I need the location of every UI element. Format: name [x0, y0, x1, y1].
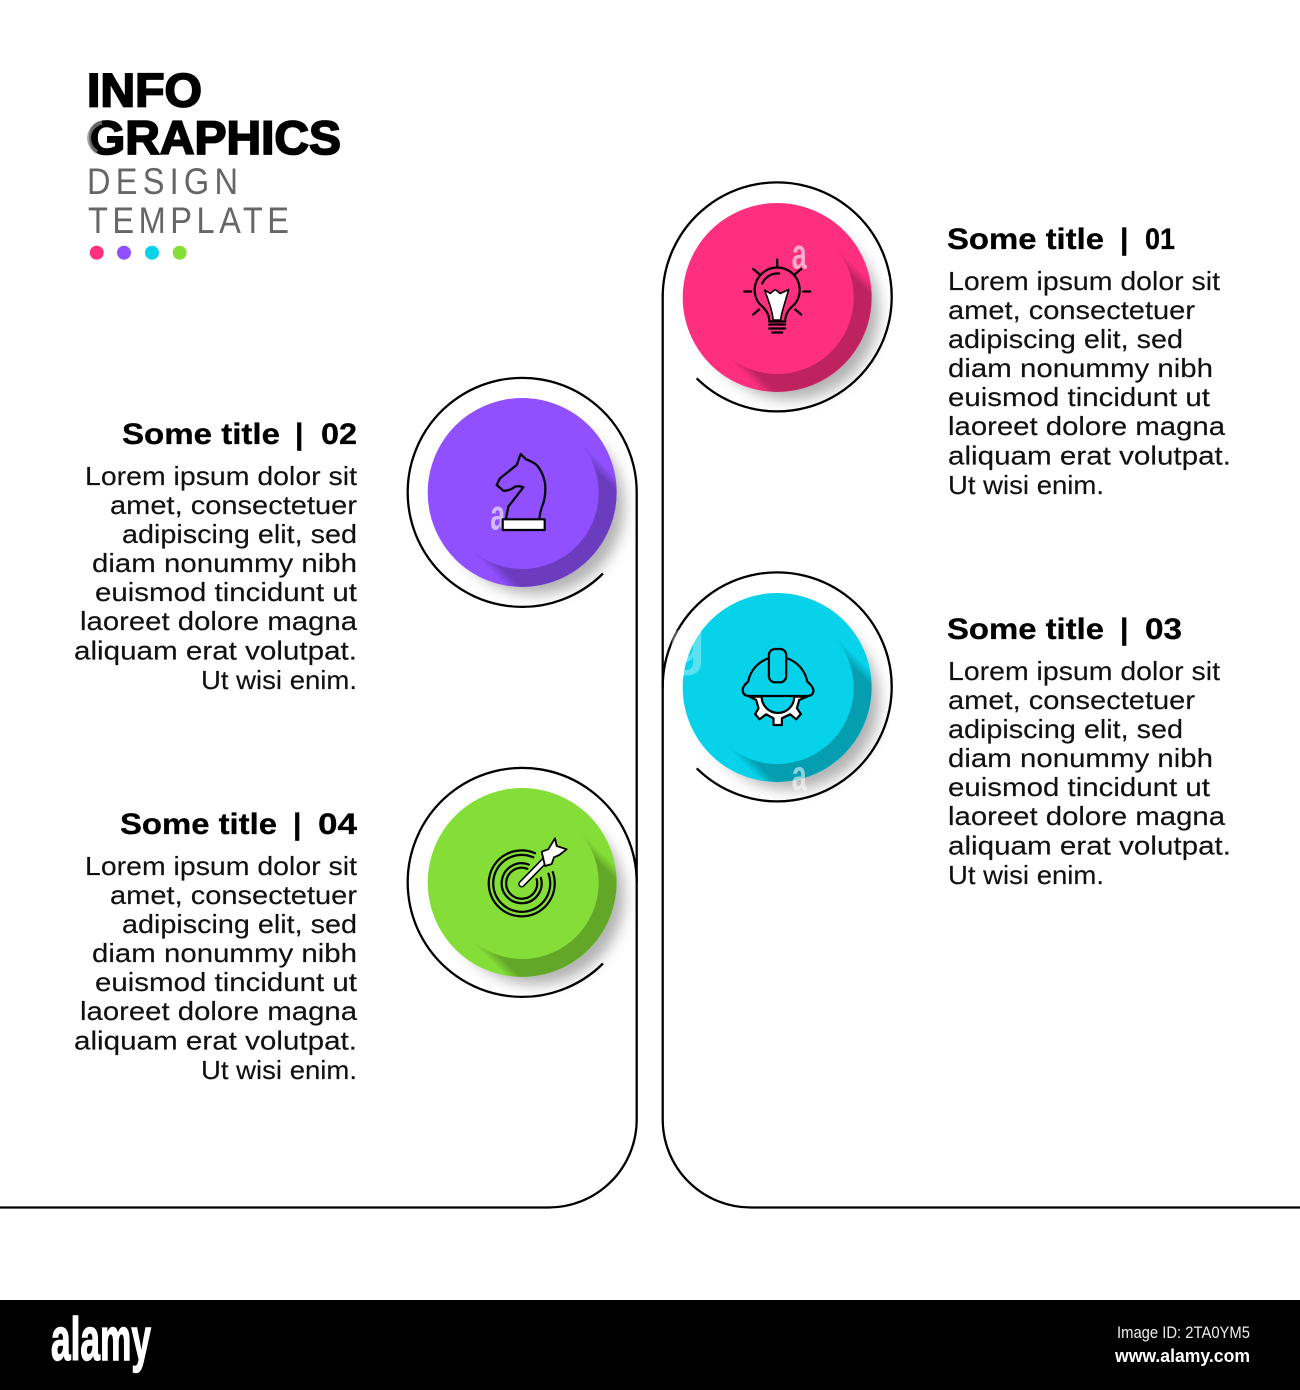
icon: chess knight	[497, 454, 545, 530]
left trunk line with spirals around steps 02 and 04	[0, 378, 637, 1208]
body text: step 03: Lorem ipsum dolor sit	[948, 656, 1221, 686]
body text: step 04: diam nonummy nibh	[92, 938, 357, 968]
right trunk line with spirals around steps 01 and 03	[663, 182, 1300, 1207]
icon: target with arrow	[489, 838, 567, 916]
step 03 circle: cyan with hard hat and gear icon: g	[669, 608, 705, 676]
step 03 circle: cyan with hard hat and gear icon	[669, 593, 872, 800]
title block	[87, 64, 341, 260]
body text: step 01: laoreet dolore magna	[948, 411, 1226, 441]
body text: step 02: laoreet dolore magna	[80, 606, 358, 636]
heading: Some title 01	[947, 223, 1175, 256]
heading: Some title 01: |	[1120, 223, 1128, 256]
title: INFO GRAPHICS: GRAPHICS	[88, 111, 341, 164]
subtitle: DESIGN TEMPLATE: DESIGN	[87, 161, 238, 202]
step 04 circle: green with target icon	[428, 788, 617, 977]
heading: Some title 04	[120, 808, 357, 841]
body text: step 01: diam nonummy nibh	[948, 353, 1213, 383]
watermark smudge over the G	[89, 122, 102, 152]
body text: step 03: Ut wisi enim.	[948, 860, 1104, 890]
heading: Some title 04: |	[293, 808, 301, 841]
heading: Some title 02: Some title	[122, 418, 280, 451]
body text: step 04: adipiscing elit, sed	[122, 909, 357, 939]
body text: step 03: adipiscing elit, sed	[948, 714, 1183, 744]
body text: step 03: aliquam erat volutpat.	[948, 830, 1231, 860]
body text: step 01: euismod tincidunt ut	[948, 382, 1211, 412]
body text: step 04: Lorem ipsum dolor sit	[85, 851, 358, 881]
body text: step 03: diam nonummy nibh	[948, 743, 1213, 773]
body text: step 03: laoreet dolore magna	[948, 801, 1226, 831]
text block: step 02	[74, 418, 358, 695]
body text: step 01: amet, consectetuer	[948, 295, 1195, 325]
body text: step 01	[948, 266, 1231, 500]
heading: Some title 02	[122, 418, 357, 451]
icon: hard hat with gear	[743, 649, 814, 725]
body text: step 02: Lorem ipsum dolor sit	[85, 461, 358, 491]
footer image id: Image ID: 2TA0YM5	[1117, 1323, 1250, 1342]
icon: light bulb	[744, 260, 810, 332]
body text: step 01: Lorem ipsum dolor sit	[948, 266, 1221, 296]
title: INFO GRAPHICS	[87, 64, 341, 164]
heading: Some title 04: 04	[318, 808, 357, 841]
soft shadows of the circles	[448, 224, 879, 984]
heading: Some title 02: |	[295, 418, 303, 451]
heading: Some title 01: Some title	[947, 223, 1104, 256]
body text: step 02: Ut wisi enim.	[201, 665, 357, 695]
body text: step 01: adipiscing elit, sed	[948, 324, 1183, 354]
title: INFO GRAPHICS: INFO	[87, 64, 202, 116]
heading: Some title 03	[947, 613, 1182, 646]
text block: step 04	[74, 808, 358, 1085]
footer url: www.alamy.com	[1114, 1346, 1250, 1366]
step 02 circle: purple with chess knight icon	[428, 398, 617, 587]
step 02 circle: purple with chess knight icon: a	[490, 492, 506, 540]
heading: Some title 04: Some title	[120, 808, 277, 841]
footer logo: alamy: alamy	[51, 1306, 151, 1373]
body text: step 03	[948, 656, 1231, 890]
body text: step 02: euismod tincidunt ut	[95, 577, 358, 607]
colour dots	[90, 246, 187, 260]
body text: step 02: aliquam erat volutpat.	[74, 636, 357, 666]
heading: Some title 03: Some title	[947, 613, 1104, 646]
heading: Some title 03: 03	[1145, 613, 1182, 646]
body text: step 02: diam nonummy nibh	[92, 548, 357, 578]
body text: step 04: aliquam erat volutpat.	[74, 1026, 357, 1056]
heading: Some title 03: |	[1120, 613, 1128, 646]
subtitle: DESIGN TEMPLATE: TEMPLATE	[88, 200, 289, 241]
body text: step 02	[74, 461, 358, 695]
heading: Some title 01: 01	[1145, 223, 1175, 256]
body text: step 04	[74, 851, 358, 1085]
subtitle: DESIGN TEMPLATE	[87, 161, 289, 241]
footer band	[0, 1300, 1300, 1390]
body text: step 04: laoreet dolore magna	[80, 996, 358, 1026]
step 01 circle: pink with bulb icon: a	[792, 230, 807, 278]
text block: step 03	[947, 613, 1231, 890]
step 01 circle: pink with bulb icon	[683, 203, 872, 392]
body text: step 03: amet, consectetuer	[948, 685, 1195, 715]
body text: step 02: amet, consectetuer	[110, 490, 357, 520]
step 03 circle: cyan with hard hat and gear icon: a	[792, 752, 807, 800]
body text: step 04: Ut wisi enim.	[201, 1055, 357, 1085]
body text: step 02: adipiscing elit, sed	[122, 519, 357, 549]
text block: step 01	[947, 223, 1231, 500]
body text: step 04: amet, consectetuer	[110, 880, 357, 910]
body text: step 01: aliquam erat volutpat.	[948, 440, 1231, 470]
heading: Some title 02: 02	[321, 418, 357, 451]
body text: step 01: Ut wisi enim.	[948, 470, 1104, 500]
body text: step 03: euismod tincidunt ut	[948, 772, 1211, 802]
body text: step 04: euismod tincidunt ut	[95, 967, 358, 997]
